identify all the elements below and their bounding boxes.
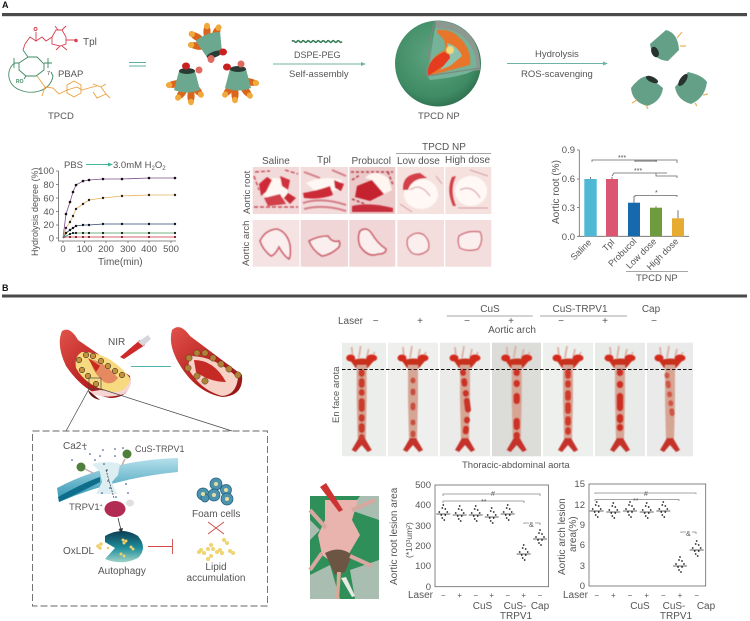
arrow: hydrolysis: Hydrolysis	[535, 49, 579, 60]
chart: aortic root lesion area: 200	[415, 541, 431, 552]
aortic arch micrographs	[253, 220, 491, 267]
chart: hydrolysis degree: 200	[98, 244, 114, 255]
cyclodextrin ring	[9, 50, 53, 92]
panel B label: B	[2, 283, 9, 293]
arrow: channel to TRPV1	[106, 470, 114, 498]
chart: aortic arch lesion area: Aortic arch lesion	[557, 498, 568, 575]
chart: hydrolysis degree: O	[155, 160, 162, 171]
ion channel	[92, 462, 120, 494]
chart: aortic root lesion area: Cap	[531, 601, 550, 612]
chart: hydrolysis degree: 400	[141, 244, 157, 255]
RO label: RO	[16, 79, 24, 85]
CuS particles	[76, 450, 132, 473]
TPCD NP label: TPCD NP	[418, 111, 460, 122]
chart: aortic root lesion area: +	[489, 591, 494, 600]
x labels: Low dose	[624, 236, 658, 271]
arrow: self-assembly: DSPE-PEG	[294, 50, 341, 60]
group header row	[338, 304, 661, 336]
group header row: CuS-TRPV1	[552, 304, 608, 315]
chart: aortic root lesion area: **	[481, 499, 487, 506]
chart: aortic root lesion area: &	[529, 522, 534, 529]
chart: hydrolysis degree: Hydrolysis degree (%)	[30, 167, 40, 256]
chart: aortic arch lesion area: +	[678, 591, 683, 600]
chart: aortic arch lesion area: CuS-	[663, 601, 685, 612]
chart: hydrolysis degree: 2	[152, 166, 156, 172]
icon: DSPE-PEG chain	[292, 41, 342, 42]
chart: aortic root lesion area: CuS-	[504, 601, 526, 612]
group header row: −	[558, 316, 564, 327]
x labels: Probucol	[606, 236, 638, 269]
chart: aortic root lesion area	[389, 480, 550, 621]
group header row: −	[651, 316, 657, 327]
x labels	[569, 236, 680, 272]
significance brackets	[592, 160, 677, 197]
chart: aortic arch lesion area: −	[628, 591, 633, 600]
chart: hydrolysis degree: 300	[120, 244, 136, 255]
treated blood vessel	[171, 327, 242, 397]
Lipid accumulation label: Lipid	[205, 562, 227, 573]
TRPV1 label: TRPV1	[69, 502, 100, 513]
TPCD chemical structure	[9, 26, 110, 98]
TRPV1 protein	[104, 500, 134, 517]
chart: aortic root bars: TPCD NP	[636, 273, 678, 284]
assembled TPCD clusters	[165, 23, 260, 105]
chart: hydrolysis degree: 80	[43, 180, 54, 191]
chart: aortic root lesion area: −	[505, 591, 510, 600]
chart: aortic root bars: ***	[618, 155, 626, 162]
icon: autophagosome	[105, 531, 143, 562]
Autophagy label: Autophagy	[98, 566, 146, 577]
arrow: self-assembly	[273, 41, 366, 80]
aortic root micrographs	[253, 167, 491, 214]
group header row: −	[373, 316, 379, 327]
TPCD label: TPCD	[48, 111, 74, 122]
aorta 1	[346, 346, 377, 452]
histology panel: Aortic arch	[241, 221, 252, 266]
en face aorta photographs	[342, 343, 693, 456]
chart: hydrolysis degree: 40	[43, 207, 54, 218]
equals sign	[129, 62, 146, 66]
chart: hydrolysis degree: 2	[162, 166, 166, 172]
chart: aortic root lesion area: 100	[415, 561, 431, 572]
released cyclodextrin cones	[631, 30, 708, 109]
icon: syringe	[320, 483, 343, 512]
chart: aortic root lesion area: 2	[406, 525, 412, 528]
chart: aortic arch lesion area: −	[694, 591, 699, 600]
TRPV1 label: +	[100, 503, 103, 509]
mouse photograph	[310, 483, 379, 599]
TPCD NP sphere	[395, 20, 481, 106]
Thoracic label: Thoracic-abdominal aorta	[462, 460, 570, 471]
cone 2	[631, 74, 663, 109]
arrow: TRPV1 to autophagy	[118, 518, 123, 534]
dashed level line	[342, 368, 693, 370]
chart: aortic arch lesion area: 0	[580, 581, 585, 592]
histology panel	[241, 142, 491, 267]
chart: hydrolysis degree: 60	[43, 194, 54, 204]
chart: aortic root lesion area: 300	[415, 521, 431, 532]
aorta 7	[654, 346, 686, 452]
tpl	[306, 178, 342, 191]
chart: aortic root lesion area: −	[473, 591, 478, 600]
calcium ions	[71, 447, 129, 498]
group header row: +	[417, 316, 423, 327]
arrow: self-assembly: Self-assembly	[289, 69, 349, 80]
aorta 5	[552, 346, 584, 452]
chart: aortic root bars: ***	[634, 168, 642, 175]
chart: aortic root bars: 0.9	[562, 145, 575, 156]
chart: aortic root bars: Aortic root (%)	[551, 160, 562, 224]
panel A divider	[2, 13, 747, 16]
chart: hydrolysis degree: 500	[163, 244, 179, 255]
column headers: Probucol	[352, 156, 391, 167]
group header row: CuS	[480, 304, 500, 315]
label: CuS-TRPV1: CuS-TRPV1	[135, 444, 185, 454]
group header row: −	[464, 316, 470, 327]
chart: aortic root lesion area: 500	[415, 480, 431, 491]
connector line	[131, 366, 171, 368]
chart: aortic arch lesion area: −	[594, 591, 599, 600]
column headers: High dose	[445, 155, 490, 166]
chart: hydrolysis degree: 100	[38, 166, 54, 177]
chart: aortic arch lesion area: &	[686, 531, 691, 538]
chart: aortic arch lesion area: 6	[580, 540, 585, 551]
chart: aortic root lesion area: um	[404, 528, 414, 540]
group header row: +	[602, 316, 608, 327]
PBAP orange group	[37, 76, 110, 98]
cluster right	[220, 60, 260, 103]
column headers: TPCD NP	[422, 142, 466, 153]
chart: aortic arch lesion area: #	[644, 491, 648, 498]
cone 1	[650, 30, 686, 61]
chart: aortic root lesion area: +	[521, 591, 526, 600]
chart: aortic root bars: *	[655, 190, 658, 197]
blood vessel with plaque	[60, 330, 131, 400]
cone 3	[675, 72, 708, 106]
label: Ca2+: Ca2+	[63, 441, 87, 452]
chart: aortic root lesion area: 3	[406, 539, 412, 542]
chart: aortic root lesion area: Aortic root lesion area	[389, 487, 400, 585]
column headers: Tpl	[317, 155, 331, 166]
OxLDL label: OxLDL	[63, 546, 95, 557]
series purple	[63, 178, 175, 238]
series navy	[63, 224, 175, 238]
chart: aortic root lesion area: (*10	[404, 542, 414, 558]
Tpl group	[23, 26, 77, 50]
cross mark	[208, 522, 224, 534]
chart: hydrolysis degree: 0	[49, 234, 54, 244]
chart: hydrolysis degree: 20	[43, 220, 54, 231]
x labels: Saline	[569, 237, 593, 262]
chart: aortic arch lesion area: **	[633, 498, 639, 505]
chart: aortic root bars: 0.6	[562, 174, 575, 185]
En face label: En face arota	[331, 366, 342, 423]
series green	[63, 233, 175, 238]
chart: aortic arch lesion area: 12	[574, 500, 585, 511]
aorta 4	[501, 346, 532, 452]
column headers: Low dose	[397, 156, 440, 167]
nanoparticles on plaque	[76, 352, 125, 387]
inhibition symbol	[148, 539, 172, 554]
aorta 3	[450, 346, 480, 452]
zoom lines and inset box marker	[66, 378, 232, 431]
panel B divider	[2, 294, 747, 298]
arrow: hydrolysis	[507, 49, 608, 80]
group header row: +	[508, 316, 514, 327]
chart: aortic arch lesion area: Cap	[697, 601, 716, 612]
icon: foam cells	[197, 478, 233, 505]
chart: aortic arch lesion area: +	[644, 591, 649, 600]
Tpl label: Tpl	[83, 37, 97, 48]
chart: aortic root bars	[551, 145, 689, 284]
bars	[584, 179, 597, 236]
column headers: Saline	[262, 156, 290, 167]
chart: aortic root lesion area: +	[457, 591, 462, 600]
chart: aortic root lesion area: #	[491, 491, 495, 498]
legend: PBS	[64, 160, 83, 171]
chart: aortic root bars: 0.3	[562, 203, 575, 214]
chart: aortic arch lesion area: 15	[574, 479, 585, 490]
chart: aortic arch lesion area: CuS	[630, 601, 650, 612]
aorta 2	[398, 346, 428, 452]
chart: aortic arch lesion area: +	[611, 591, 616, 600]
chart: aortic root bars: 0.0	[562, 232, 575, 243]
chart: aortic root lesion area: 0	[426, 582, 431, 593]
inset dashed box	[32, 431, 268, 606]
icon: NIR laser pen	[120, 335, 151, 359]
chart: aortic arch lesion area: 3	[580, 561, 585, 572]
chart: aortic root lesion area: −	[538, 591, 543, 600]
chart: aortic root lesion area: 400	[415, 500, 431, 511]
high dose	[455, 176, 487, 206]
series orange	[63, 195, 175, 238]
chart: aortic arch lesion area: 9	[580, 520, 585, 531]
chart: aortic root lesion area: )	[404, 522, 414, 525]
chart: aortic arch lesion area	[557, 479, 716, 621]
group header row: Laser	[338, 316, 364, 327]
cluster top	[187, 23, 228, 63]
probucol	[365, 173, 392, 194]
Lipid accumulation label	[187, 562, 245, 584]
x labels: High dose	[645, 236, 680, 272]
chart: hydrolysis degree: 3.0mM H	[113, 160, 152, 171]
panel A label: A	[2, 0, 9, 10]
NIR label: NIR	[108, 337, 125, 348]
chart: aortic arch lesion area: Laser	[563, 590, 589, 601]
chart: hydrolysis degree: 100	[77, 244, 92, 255]
saline	[262, 178, 288, 200]
chart: aortic arch lesion area: area(%)	[568, 516, 579, 552]
group header row: Aortic arch	[488, 325, 536, 336]
chart: aortic root lesion area: CuS	[473, 601, 493, 612]
chart: hydrolysis degree: 0	[60, 244, 66, 255]
icon: oxLDL particle	[96, 542, 103, 550]
group header row: Cap	[642, 304, 661, 315]
column headers	[262, 142, 490, 167]
x labels: Tpl	[600, 237, 616, 253]
chart: hydrolysis degree	[30, 160, 179, 268]
chart: aortic root lesion area: −	[441, 591, 446, 600]
Foam cells label: Foam cells	[192, 509, 240, 520]
series red	[63, 237, 175, 238]
index 7: 7	[47, 71, 50, 77]
row labels: Aortic root	[242, 170, 253, 214]
cluster left	[165, 62, 206, 105]
aorta 6	[604, 346, 636, 452]
chart: aortic root lesion area: Laser	[408, 590, 434, 601]
icon: lipid droplets	[197, 538, 235, 561]
low dose	[404, 179, 438, 209]
arrow: hydrolysis: ROS-scavenging	[521, 69, 593, 80]
chart: hydrolysis degree: Time(min)	[98, 257, 143, 268]
PBAP label: PBAP	[58, 69, 83, 80]
cell membrane	[57, 458, 178, 502]
Lipid accumulation label: accumulation	[187, 573, 245, 584]
chart: aortic arch lesion area: −	[661, 591, 666, 600]
